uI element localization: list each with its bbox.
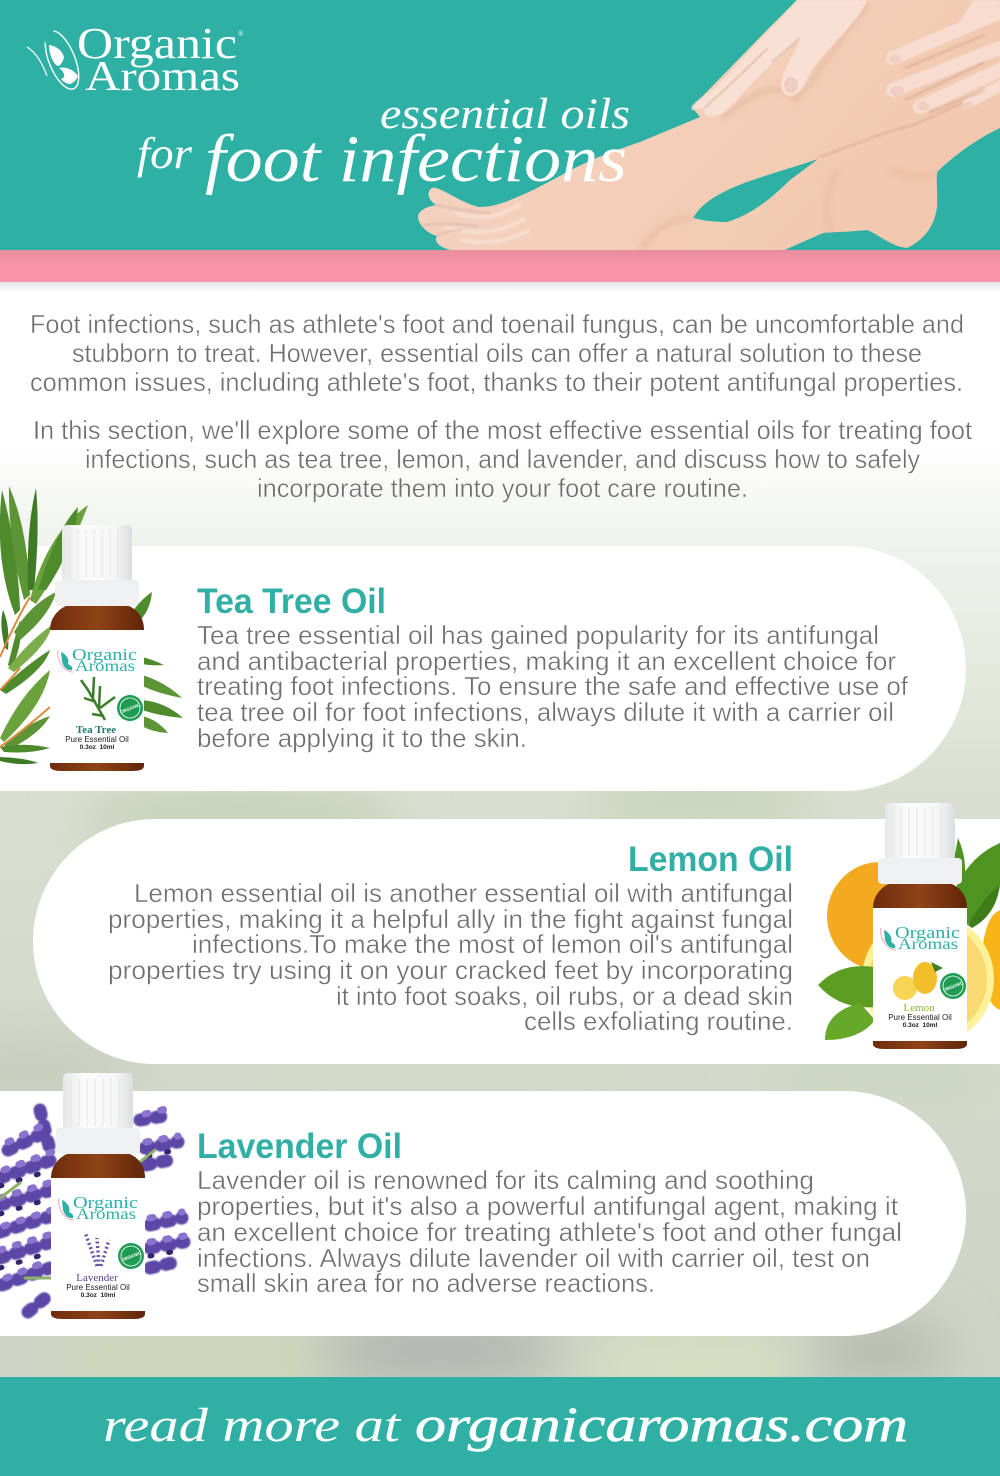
label: Tea Tree [76, 724, 116, 736]
icon: butterfly [27, 26, 86, 94]
body text: treating foot infections. To ensure the safe and effective use of [197, 671, 909, 701]
title: foot infections [205, 122, 627, 196]
body text: Lemon essential oil is another essential oil with antifungal [134, 878, 793, 908]
title: essential oils [380, 91, 630, 138]
body text: before applying it to the skin. [197, 723, 527, 753]
body text [108, 878, 793, 1036]
intro paragraph 2 [33, 415, 973, 503]
page background with blurred foliage [0, 485, 1000, 1377]
bottle: lavender [51, 1073, 145, 1319]
label: Pure Essential Oil [65, 735, 129, 744]
label: Aromas [76, 1206, 136, 1223]
body text: properties, making it a helpful ally in the fight against fungal [108, 904, 793, 934]
label: Pure Essential Oil [66, 1283, 130, 1292]
logo: ® [238, 30, 244, 38]
logo [27, 19, 244, 100]
footer call to action: read more at [103, 1399, 402, 1452]
illustration: lavender flowers [0, 1108, 184, 1312]
bottle: tea tree [50, 525, 144, 771]
label: Organic [73, 1193, 139, 1212]
body text: infections. Always dilute lavender oil with carrier oil, test on [197, 1243, 870, 1273]
bottle: lemon [873, 803, 967, 1049]
heading: Tea Tree Oil [197, 582, 386, 621]
intro paragraph 2: infections, such as tea tree, lemon, and lavender, and discuss how to safely [85, 444, 920, 474]
panel: lemon oil [33, 803, 1000, 1064]
label [59, 1193, 144, 1299]
body text: properties try using it on your cracked feet by incorporating [108, 955, 793, 985]
heading: Lavender Oil [197, 1127, 402, 1166]
label: Aromas [75, 658, 135, 675]
label: Lemon [903, 1002, 935, 1014]
body text: Tea tree essential oil has gained popularity for its antifungal [197, 620, 879, 650]
label: ORGANIC [119, 702, 142, 715]
illustration: tea tree sprigs [0, 486, 183, 764]
intro paragraph 2: incorporate them into your foot care routine. [257, 473, 748, 503]
label: 0.3oz 10ml [903, 1022, 938, 1029]
title: for [137, 129, 193, 178]
body text: an excellent choice for treating athlete's foot and other fungal [197, 1217, 902, 1247]
label: 0.3oz 10ml [80, 744, 115, 751]
intro paragraph 1 [30, 309, 964, 397]
label: Pure Essential Oil [888, 1013, 952, 1022]
header band [0, 0, 1000, 252]
body text: cells exfoliating routine. [524, 1006, 793, 1036]
logo: Organic [77, 19, 237, 68]
body text: it into foot soaks, oil rubs, or a dead skin [336, 981, 793, 1011]
title [137, 91, 630, 196]
label [58, 645, 143, 751]
panel: tea tree oil [0, 486, 966, 791]
logo: Aromas [85, 54, 240, 100]
body text: Lavender oil is renowned for its calming and soothing [197, 1165, 814, 1195]
label: 0.3oz 10ml [81, 1292, 116, 1299]
label [881, 923, 966, 1029]
body text: and antibacterial properties, making it an excellent choice for [197, 646, 896, 676]
label: Organic [72, 645, 138, 664]
body text: properties, but it's also a powerful antifungal agent, making it [197, 1191, 899, 1221]
label: Lavender [76, 1272, 118, 1284]
footer call to action: organicaromas.com [415, 1396, 908, 1452]
heading: Lemon Oil [628, 840, 793, 879]
label: Aromas [898, 936, 958, 953]
footer call to action [103, 1396, 908, 1452]
pink ribbon [0, 250, 1000, 292]
body text [197, 620, 909, 753]
label: ORGANIC [120, 1250, 143, 1263]
label: ORGANIC [942, 980, 965, 993]
intro paragraph 1: stubborn to treat. However, essential oils can offer a natural solution to these [72, 338, 922, 368]
panel: lavender oil [0, 1073, 966, 1336]
body text: infections.To make the most of lemon oil's antifungal [192, 929, 793, 959]
intro paragraph 1: common issues, including athlete's foot, thanks to their potent antifungal properties. [30, 367, 963, 397]
body text: small skin area for no adverse reactions. [197, 1268, 655, 1298]
footer [0, 1377, 1000, 1476]
label: Organic [895, 923, 961, 942]
body text: tea tree oil for foot infections, always dilute it with a carrier oil [197, 697, 894, 727]
intro paragraph 2: In this section, we'll explore some of the most effective essential oils for treating foot [33, 415, 973, 445]
photo: hands on legs and feet [418, 0, 1000, 252]
body text [197, 1165, 902, 1298]
illustration: lemons and leaves [818, 838, 1000, 1045]
intro paragraph 1: Foot infections, such as athlete's foot and toenail fungus, can be uncomfortable and [30, 309, 964, 339]
